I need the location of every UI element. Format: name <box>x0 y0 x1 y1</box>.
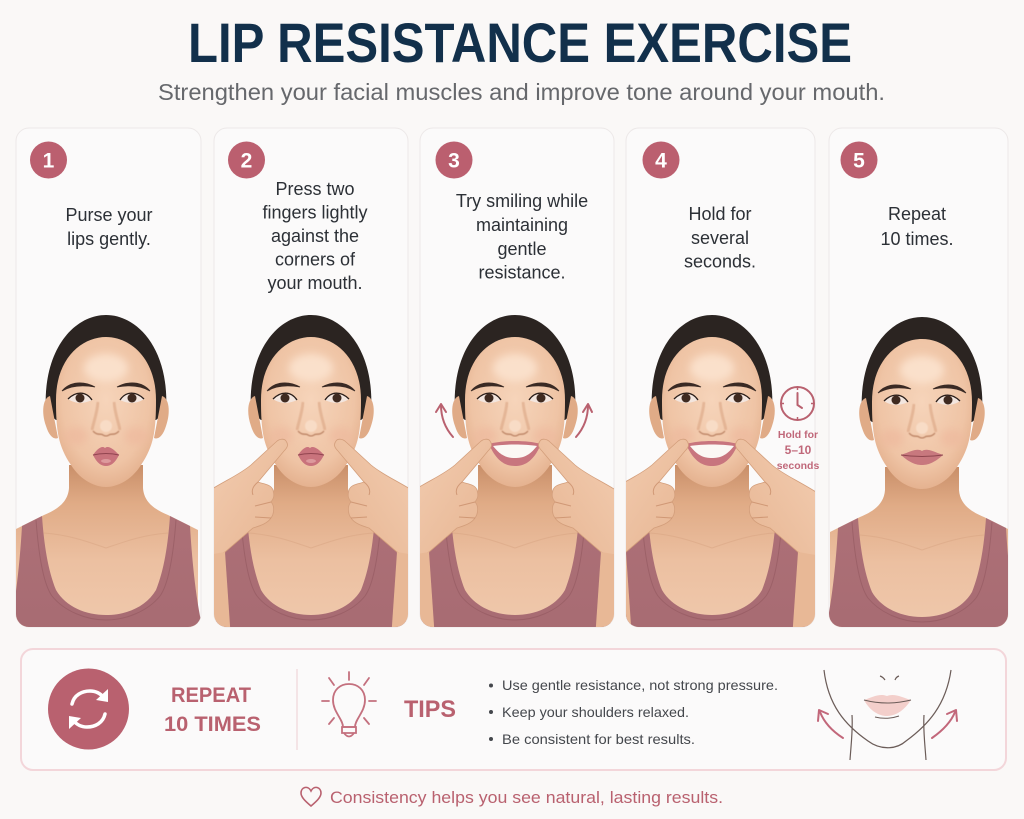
step 2 badge <box>228 142 265 178</box>
icon: repeat <box>48 668 129 750</box>
step 5 badge <box>840 142 878 178</box>
step 2 text: fingers lightly <box>262 202 368 222</box>
step 5 text: Repeat <box>888 204 946 224</box>
step 1 badge <box>30 142 67 178</box>
arrow: right jaw lift <box>932 710 957 738</box>
tips list: Keep your shoulders relaxed. <box>502 704 689 720</box>
step 5 photo: relaxed face <box>829 317 1008 627</box>
tips heading: TIPS <box>404 696 456 723</box>
tips list: Be consistent for best results. <box>502 731 695 747</box>
repeat label: REPEAT <box>171 684 251 707</box>
title: LIP RESISTANCE EXERCISE <box>188 11 852 74</box>
step 2 text: against the <box>271 226 359 246</box>
subtitle: Strengthen your facial muscles and improve tone around your mouth. <box>158 79 885 105</box>
arrow: right cheek lift <box>576 404 592 437</box>
step 4 text: several <box>691 228 749 248</box>
panel: step 1 <box>10 128 202 640</box>
step 2 badge: 2 <box>241 150 252 172</box>
icon: face line drawing with lips <box>824 670 951 760</box>
step 2 photo: fingers at mouth corners <box>214 315 408 627</box>
step 2 text: corners of <box>275 250 356 270</box>
step 2 text: your mouth. <box>267 273 363 293</box>
step 3 photo: smile with resistance <box>420 315 614 627</box>
step 3 text: resistance. <box>478 262 566 282</box>
divider <box>296 669 298 750</box>
hold duration callout: seconds <box>777 460 819 472</box>
panel: step 5 <box>826 128 1018 642</box>
step 4 photo: holding smile <box>626 315 815 627</box>
step 3 badge: 3 <box>448 150 460 172</box>
step 4 badge: 4 <box>655 150 667 172</box>
hold duration callout: Hold for <box>778 429 818 441</box>
step 3 text: Try smiling while <box>456 191 588 211</box>
step 3 text: gentle <box>497 239 547 259</box>
panel: step 3 <box>411 128 619 640</box>
step 4 text: seconds. <box>684 252 756 272</box>
hold duration callout: 5–10 <box>785 443 812 457</box>
panel: repeat and tips <box>21 649 1006 770</box>
icon: heart <box>301 787 321 806</box>
tips list: Use gentle resistance, not strong pressure. <box>502 677 778 693</box>
icon: light bulb <box>322 672 376 736</box>
step 1 badge: 1 <box>43 150 55 172</box>
icon: clock <box>781 387 814 420</box>
step 1 text: lips gently. <box>67 229 151 249</box>
step 3 text: maintaining <box>476 215 568 235</box>
arrow: left jaw lift <box>818 710 843 738</box>
step 5 badge: 5 <box>853 150 865 172</box>
step 2 text: Press two <box>275 179 355 199</box>
footer message: Consistency helps you see natural, lasting results. <box>330 788 723 807</box>
step 4 text: Hold for <box>688 204 752 224</box>
step 1 text: Purse your <box>65 205 153 225</box>
tips list <box>489 677 778 747</box>
step 3 badge <box>436 142 472 178</box>
panel: step 2 <box>207 128 415 640</box>
step 1 photo: pursed lips <box>10 315 202 640</box>
panel: step 4 <box>626 128 819 628</box>
step 5 text: 10 times. <box>880 229 954 249</box>
arrow: left cheek lift <box>436 404 453 437</box>
step 4 badge <box>642 142 680 178</box>
repeat label: 10 TIMES <box>164 713 261 736</box>
